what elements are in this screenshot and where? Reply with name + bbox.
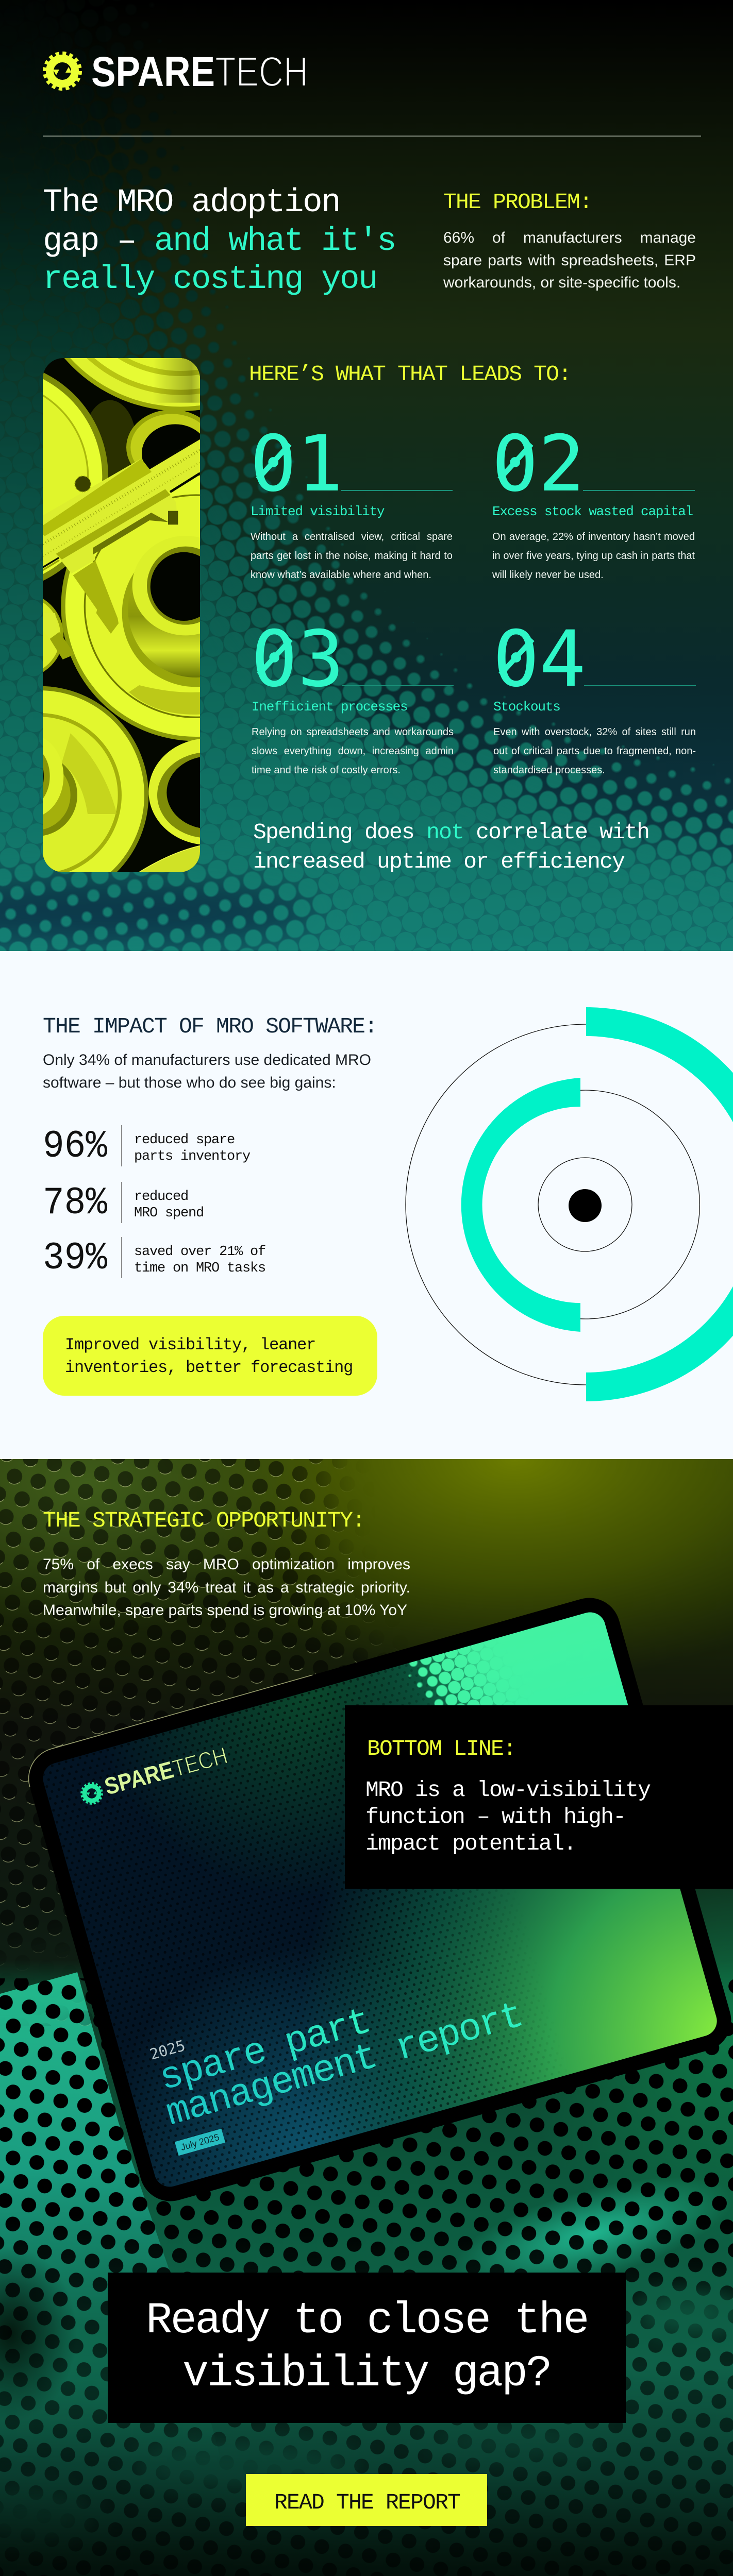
stat: 96%: parts inventory <box>134 1149 251 1164</box>
card 02: excess stock <box>492 419 695 519</box>
text: card 03 body: slows everything down, increasing admin <box>252 745 454 757</box>
cover date chip: July 2025 <box>179 2132 221 2153</box>
cover logo wordmark light: TECH <box>170 1741 230 1782</box>
heading: MRO adoption gap: really costing you <box>43 261 377 298</box>
number: 04 <box>493 615 586 704</box>
card 04: stockouts <box>493 615 696 715</box>
text: impact intro <box>43 1049 377 1094</box>
stat: 78% <box>43 1181 204 1225</box>
card heading: Limited visibility <box>251 504 385 519</box>
text: strategic opportunity paragraph: margins but only 34% treat it as a strategic priority. <box>43 1579 410 1596</box>
text: card 02 body: in over five years, tying up cash in parts that <box>492 550 695 562</box>
perforated metal background <box>0 1459 733 2576</box>
tablet mockup: report cover <box>22 1590 733 2209</box>
card heading: Inefficient processes <box>252 699 407 715</box>
text: strategic opportunity paragraph <box>43 1553 410 1622</box>
heading: the problem: THE PROBLEM: <box>443 190 592 215</box>
text: card 04 body <box>493 723 696 780</box>
callout: bottom line: function – with high- <box>365 1804 625 1829</box>
callout: improved visibility <box>43 1316 377 1396</box>
logo wordmark light part: TECH <box>215 48 308 95</box>
call to action: ready to close the gap <box>108 2273 626 2423</box>
card 01: limited visibility <box>250 419 453 519</box>
callout: bottom line: BOTTOM LINE: <box>367 1736 515 1761</box>
stat: 39%: saved over 21% of <box>134 1244 265 1260</box>
logo: SpareTech <box>45 48 215 95</box>
rule <box>341 490 453 491</box>
text: card 01 body: Without a centralised view, critical spare <box>251 531 453 543</box>
zero slash <box>499 444 531 479</box>
call to action: ready to close the gap: Ready to close the <box>146 2296 588 2346</box>
callout: spending does not correlate: Spending does not correlate with <box>253 820 649 845</box>
zero slash <box>259 639 291 674</box>
panel: strategic opportunity and call to action <box>0 1459 733 2576</box>
text: card 01 body: know what’s available where and when. <box>251 569 431 581</box>
heading: impact: THE IMPACT OF MRO SOFTWARE: <box>43 1014 377 1039</box>
number: 01 <box>250 419 343 509</box>
stat: 96%: 96% <box>43 1125 108 1168</box>
divider <box>43 136 701 137</box>
zero slash <box>501 639 532 674</box>
text: card 03 body: Relying on spreadsheets and workarounds <box>252 726 454 738</box>
text: the problem paragraph <box>443 229 696 291</box>
text: card 02 body: will likely never be used. <box>492 569 604 581</box>
icon: cover logo gear <box>81 1783 102 1804</box>
panel: impact of MRO software <box>0 951 733 1459</box>
call to action: ready to close the gap: visibility gap? <box>182 2349 551 2399</box>
logo wordmark: SPARE <box>91 48 215 95</box>
callout: improved visibility: Improved visibility, leaner <box>65 1335 315 1354</box>
text: card 04 body: standardised processes. <box>493 765 605 776</box>
text: strategic opportunity paragraph: 75% of execs say MRO optimization improves <box>43 1556 410 1573</box>
cover title: management report <box>161 1994 527 2136</box>
stat: 78%: reduced <box>134 1189 188 1205</box>
text: impact intro: software – but those who do see big gains: <box>43 1074 336 1091</box>
section background <box>0 951 733 1459</box>
callout: spending does not correlate: increased uptime or efficiency <box>253 849 625 874</box>
text: strategic opportunity paragraph: Meanwhile, spare parts spend is growing at 10% YoY <box>43 1602 407 1619</box>
zero slash <box>258 444 290 479</box>
text: card 02 body: On average, 22% of inventory hasn’t moved <box>492 531 695 543</box>
button: read the report <box>246 2474 487 2526</box>
heading: strategic opportunity: THE STRATEGIC OPPORTUNITY: <box>43 1508 364 1533</box>
card 03: inefficient processes <box>251 615 454 715</box>
number: 03 <box>251 615 344 704</box>
text: the problem paragraph: workarounds, or site-specific tools. <box>443 274 680 291</box>
rule <box>583 490 695 491</box>
text: the problem paragraph: spare parts with spreadsheets, ERP <box>443 251 696 269</box>
stat: 39%: 39% <box>43 1236 108 1280</box>
text: card 04 body: Even with overstock, 32% of sites still run <box>493 726 696 738</box>
stat: 39%: time on MRO tasks <box>134 1261 265 1276</box>
button: read the report: READ THE REPORT <box>274 2490 460 2515</box>
heading: MRO adoption gap: gap – and what it's <box>43 223 395 260</box>
heading: MRO adoption gap: The MRO adoption <box>43 184 340 222</box>
tablet body <box>22 1590 733 2209</box>
text: card 03 body: time and the risk of costly errors. <box>252 765 401 776</box>
rule <box>584 685 696 686</box>
rule <box>342 685 454 686</box>
section background with halftone <box>0 0 733 951</box>
cover date chip <box>175 2129 225 2156</box>
panel: machined parts photo <box>42 358 200 872</box>
text: card 01 body: parts get lost in the noise, making it hard to <box>251 550 453 562</box>
card heading: Excess stock wasted capital <box>492 504 693 519</box>
text: card 04 body: out of critical parts due to fragmented, non- <box>493 745 696 757</box>
stat: 96%: reduced spare <box>134 1132 235 1148</box>
stat: 78%: MRO spend <box>134 1206 204 1221</box>
stat: 78%: 78% <box>43 1181 108 1225</box>
number: 02 <box>492 419 585 509</box>
text: card 01 body <box>251 531 453 581</box>
cover year: 2025 <box>148 2037 187 2063</box>
card heading: Stockouts <box>493 699 560 715</box>
heading: MRO adoption gap <box>43 184 395 298</box>
stat: 39% <box>43 1236 265 1280</box>
cover logo wordmark: SPARE <box>102 1756 176 1800</box>
chart: concentric target rings <box>406 1007 733 1401</box>
callout: spending does not correlate <box>253 820 649 874</box>
stat: 96% <box>43 1125 251 1168</box>
cover title: spare part <box>155 2001 375 2101</box>
callout: bottom line: MRO is a low-visibility <box>365 1777 651 1803</box>
heading: what that leads to: HERE’S WHAT THAT LEADS TO: <box>249 362 571 387</box>
panel: intro section background and content <box>0 0 733 951</box>
callout: bottom line <box>345 1705 733 1889</box>
text: impact intro: Only 34% of manufacturers use dedicated MRO <box>43 1052 371 1069</box>
icon: gear <box>45 54 80 89</box>
text: the problem paragraph: 66% of manufacturers manage <box>443 229 696 246</box>
callout: improved visibility: inventories, better forecasting <box>65 1358 353 1377</box>
text: card 03 body <box>252 723 454 780</box>
callout: bottom line: impact potential. <box>365 1831 576 1856</box>
text: card 02 body <box>492 528 695 585</box>
